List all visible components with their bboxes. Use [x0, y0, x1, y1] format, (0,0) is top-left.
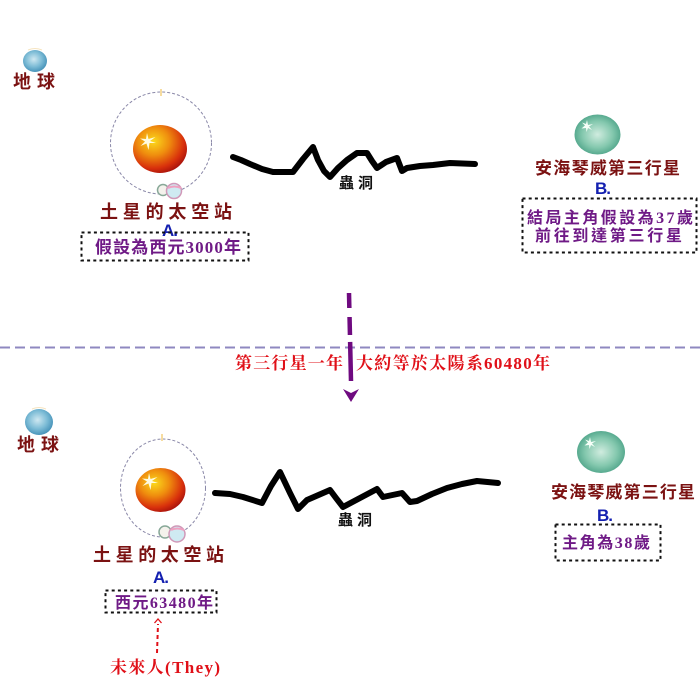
callout: year 3000 [82, 232, 248, 260]
wormhole line lower [215, 472, 498, 509]
future humans label: 未來人(They) [110, 658, 220, 677]
time conversion note left: 第三行星一年 [235, 353, 343, 373]
callout: year 63480: 西元63480年 [115, 593, 213, 612]
callout: age 37 [522, 198, 696, 252]
callout: age 37: 前往到達第三行星 [535, 226, 682, 245]
earth label: 地球 [13, 72, 55, 92]
wormhole label lower: 蟲洞 [338, 512, 372, 529]
callout: year 3000: 假設為西元3000年 [95, 237, 241, 257]
callout: age 37: 結局主角假設為37歲 [527, 208, 693, 227]
callout: age 38 [556, 524, 660, 560]
earth label lower: 地球 [17, 435, 59, 455]
icon: saturn space station lower [120, 434, 206, 542]
third planet label: 安海琴威第三行星 [535, 158, 680, 178]
icon: earth lower [25, 408, 53, 435]
third planet label lower: 安海琴威第三行星 [551, 482, 695, 502]
icon: third planet lower [577, 431, 625, 473]
wormhole line [233, 147, 475, 177]
arrow: future humans [154, 619, 162, 653]
time conversion note right: 大約等於太陽系60480年 [356, 353, 550, 373]
station label: 土星的太空站 [100, 201, 232, 222]
divider line [0, 346, 700, 348]
icon: saturn space station [110, 89, 212, 198]
callout: age 38: 主角為38歲 [562, 533, 650, 552]
point label A: A. [162, 221, 178, 240]
panel: before the trip [13, 48, 696, 260]
panel: after the trip [17, 408, 695, 677]
callout: year 63480 [106, 590, 216, 612]
point label A lower: A. [153, 568, 169, 587]
icon: earth [23, 48, 47, 72]
arrow: time transition [343, 293, 359, 402]
icon: third planet [574, 114, 620, 154]
wormhole label: 蟲洞 [339, 175, 373, 192]
station label lower: 土星的太空站 [93, 544, 224, 565]
point label B lower: B. [597, 506, 613, 525]
point label B: B. [595, 179, 611, 198]
